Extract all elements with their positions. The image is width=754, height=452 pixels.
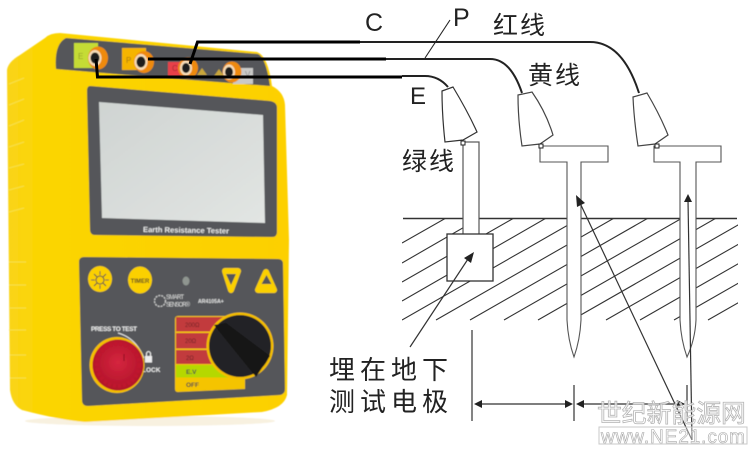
- lock icon and label: [142, 352, 161, 374]
- label red wire: 红线: [493, 12, 547, 40]
- timer button: [128, 266, 152, 294]
- earth resistance tester device: [7, 33, 289, 426]
- terminal label E: E: [78, 52, 83, 61]
- socket C: [178, 58, 198, 78]
- terminal label C: C: [172, 64, 178, 73]
- down button: [225, 271, 238, 290]
- wire C: [360, 42, 639, 93]
- label buried test electrode: 埋在地下: [329, 355, 453, 385]
- rotary dial: [206, 312, 274, 380]
- clamp pins: [461, 141, 659, 148]
- label buried test electrode: [329, 355, 453, 417]
- probe stake C: [654, 146, 721, 357]
- clamp E: [442, 87, 477, 142]
- label yellow wire: 黄线: [528, 62, 582, 90]
- range OFF: OFF: [186, 382, 199, 389]
- label C: C: [365, 9, 383, 37]
- clamp P: [518, 92, 553, 146]
- down button inner triangle: [226, 274, 236, 285]
- label green wire: 绿线: [402, 148, 456, 176]
- range 2 ohm: 2Ω: [186, 356, 194, 362]
- wire P: [386, 59, 522, 93]
- terminal label P: [122, 48, 146, 70]
- device name: Earth Resistance Tester: [143, 225, 229, 236]
- socket E: [88, 46, 108, 70]
- terminal panel: [56, 38, 270, 86]
- up button inner triangle: [262, 275, 272, 284]
- terminal label P: P: [126, 56, 131, 65]
- terminal label C: [168, 62, 190, 76]
- display frame: [87, 86, 277, 237]
- model number: AR4105A+: [198, 299, 224, 305]
- watermark: [597, 400, 747, 448]
- label P: P: [453, 4, 470, 32]
- terminal label E: [74, 43, 98, 68]
- brand logo: SMART: [166, 295, 184, 301]
- distance dimensions: [472, 330, 687, 421]
- red test knob: [90, 337, 144, 393]
- watermark: www.NE21.com: [600, 427, 745, 448]
- arrow to electrode: [410, 252, 474, 347]
- arrow to C stake: [684, 194, 692, 440]
- watermark: 世纪新能源网: [597, 400, 746, 428]
- probe stake P: [540, 146, 608, 357]
- buried test electrode: [447, 142, 493, 281]
- range 200 ohm: 200Ω: [185, 323, 200, 329]
- leads from device terminals: [96, 42, 402, 77]
- brand logo: SENSOR®: [166, 302, 191, 308]
- lock icon and label: LOCK: [142, 367, 161, 374]
- small panel triangles: [197, 68, 224, 76]
- wire E: [402, 76, 448, 87]
- side grip grooves: [9, 78, 26, 378]
- up button: [258, 272, 274, 290]
- clamp C: [633, 93, 668, 146]
- range selector: [175, 316, 245, 392]
- range E.V: E.V: [186, 369, 197, 376]
- indicator LED: [182, 276, 190, 286]
- soil hatching: [402, 217, 754, 320]
- terminal label V: [233, 68, 253, 84]
- ground line: [403, 218, 737, 220]
- brand logo: [154, 295, 191, 308]
- device shadow: [25, 416, 275, 426]
- press to test label: PRESS TO TEST: [91, 326, 137, 333]
- terminal label V: V: [245, 70, 251, 79]
- LCD screen: [99, 102, 265, 223]
- range 20 ohm: 20Ω: [185, 339, 197, 345]
- electrode box: [447, 234, 493, 281]
- electrode rod: [463, 142, 479, 235]
- P leader line: [425, 20, 450, 58]
- test arrow: [118, 333, 144, 358]
- yellow housing: [7, 33, 289, 422]
- diagram linework: [360, 20, 754, 440]
- arrow to P stake: [576, 195, 692, 440]
- socket V: [222, 62, 242, 82]
- label buried test electrode: 测试电极: [329, 387, 453, 417]
- backlight button: [88, 266, 112, 292]
- control panel: [79, 257, 285, 406]
- timer button: TIMER: [131, 279, 150, 285]
- label E: E: [410, 83, 426, 110]
- socket P: [134, 51, 154, 73]
